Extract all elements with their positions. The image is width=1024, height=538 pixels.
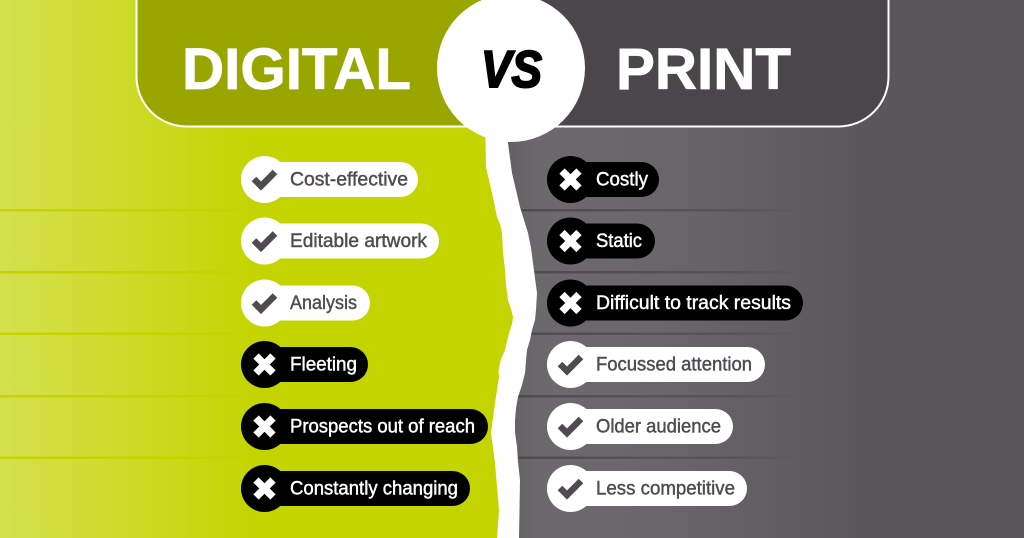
header outline [136, 0, 888, 126]
header right half [512, 0, 888, 126]
icon: cross [562, 232, 579, 250]
digital con: constantly changing: Constantly changing [290, 478, 458, 500]
panel: print background [497, 0, 1024, 538]
print pro: focussed attention [547, 341, 765, 388]
digital pro: cost-effective: Cost-effective [290, 168, 408, 190]
vs circle badge [437, 0, 585, 142]
digital con: fleeting: Fleeting [290, 354, 357, 376]
icon: cross [562, 171, 579, 188]
digital con: fleeting [241, 341, 368, 388]
print pro: older audience [547, 403, 733, 450]
icon: cross [256, 480, 273, 497]
print pro: older audience: Older audience [596, 416, 721, 438]
digital pro: editable artwork: Editable artwork [290, 230, 427, 252]
print con: costly: Costly [596, 168, 648, 190]
print con: static: Static [596, 230, 642, 252]
icon: cross [562, 294, 579, 312]
digital pro: analysis [241, 280, 370, 326]
icon: cross [256, 356, 273, 373]
digital pro: analysis: Analysis [290, 292, 357, 314]
icon: check [560, 357, 581, 371]
icon: check [560, 481, 581, 495]
right row dividers [515, 209, 805, 459]
icon: check [254, 296, 275, 310]
digital con: prospects out of reach [241, 403, 488, 450]
icon: check [254, 172, 275, 186]
icon: cross [256, 418, 273, 435]
print pro: focussed attention: Focussed attention [596, 354, 752, 376]
print pro: less competitive: Less competitive [596, 478, 735, 500]
vs label: VS [481, 41, 542, 99]
panel: digital background [0, 0, 530, 538]
digital pro: cost-effective [241, 156, 418, 203]
print pro: less competitive [547, 465, 747, 512]
heading: print: PRINT [616, 37, 791, 102]
torn paper divider [485, 130, 537, 538]
header left half [136, 0, 512, 126]
panel: header [136, 0, 888, 126]
digital pro: editable artwork [241, 218, 439, 264]
icon: check [560, 419, 581, 433]
heading: digital: DIGITAL [182, 37, 411, 102]
left row dividers [0, 209, 240, 459]
digital con: prospects out of reach: Prospects out of reach [290, 416, 475, 438]
print con: static [547, 218, 655, 264]
icon: check [254, 234, 275, 248]
print con: costly [547, 156, 659, 203]
digital con: constantly changing [241, 465, 470, 512]
print con: difficult to track results: Difficult to track results [596, 292, 791, 314]
print con: difficult to track results [547, 280, 803, 326]
